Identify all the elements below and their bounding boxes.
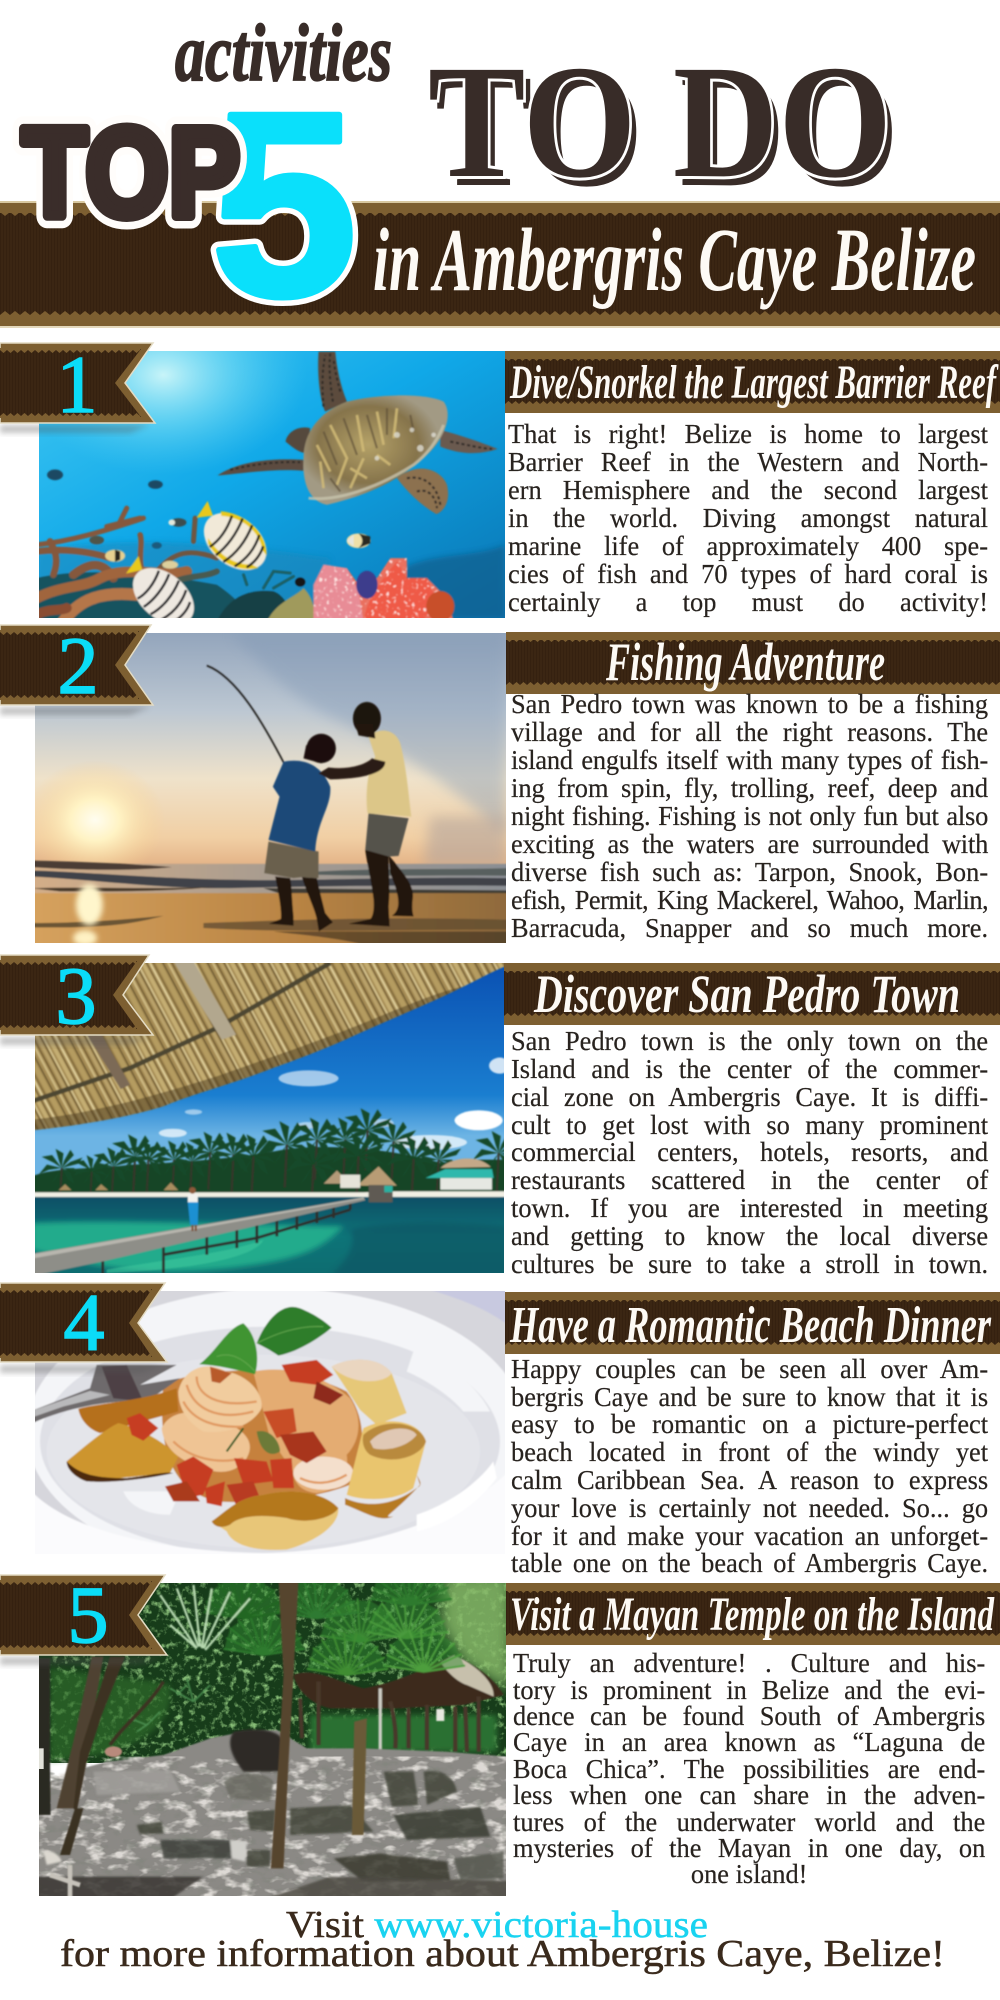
text block: Mayan temple: one island!	[691, 1858, 807, 1889]
thatch roof	[32, 960, 507, 1130]
corals	[37, 508, 217, 621]
text block: dive and snorkel: certainly a top must do activity!	[508, 586, 988, 617]
text block: dive and snorkel: in the world. Diving amongst natural	[508, 502, 988, 533]
plantains	[78, 1388, 178, 1433]
ground and stone terraces	[36, 1730, 509, 1899]
text block: San Pedro town: San Pedro town is the only town on the	[511, 1025, 988, 1056]
big cyan number 5: 5	[211, 58, 357, 351]
water	[32, 1197, 507, 1276]
ribbon number 5: 5	[68, 1569, 108, 1660]
man silhouette	[319, 702, 414, 926]
text block: romantic beach dinner: table one on the beach of Ambergris Caye.	[511, 1547, 988, 1578]
text block: San Pedro town: commercial centers, hotels, resorts, and	[511, 1136, 988, 1167]
text block: fishing adventure: night fishing. Fishing is not only fun but also	[511, 800, 988, 831]
text block: fishing adventure	[510, 688, 988, 944]
text block: dive and snorkel: ern Hemisphere and the second largest	[508, 474, 988, 505]
text block: San Pedro town: town. If you are interested in meeting	[511, 1192, 988, 1223]
text block: Mayan temple: tures of the underwater world and the	[513, 1806, 985, 1837]
title: activities: activities	[175, 7, 392, 98]
photo 1: sea turtle and reef	[39, 351, 505, 618]
text block: romantic beach dinner: for it and make your vacation an unforget-	[511, 1520, 988, 1551]
ribbon number 5	[0, 1569, 167, 1665]
small fish	[47, 470, 371, 587]
palm fans	[204, 1562, 464, 1675]
sea	[32, 864, 509, 894]
text block: romantic beach dinner: calm Caribbean Sea. A reason to express	[511, 1464, 988, 1495]
text block: San Pedro town	[511, 1025, 988, 1279]
ribbon number 3: 3	[56, 950, 96, 1041]
sea turtle	[217, 352, 498, 514]
wooden dock	[32, 1197, 366, 1276]
footer call to action: for more information about Ambergris Caye, Belize!	[60, 1933, 945, 1975]
photo 2: father and son fishing at sunset	[35, 633, 506, 943]
text block: San Pedro town: cial zone on Ambergris Caye. It is diffi-	[511, 1081, 988, 1112]
footer call to action	[60, 1904, 945, 1975]
text block: romantic beach dinner: bergris Caye and be sure to know that it is	[511, 1381, 988, 1412]
text block: Mayan temple: Truly an adventure! . Culture and his-	[513, 1647, 985, 1678]
fork	[32, 1365, 180, 1423]
boy silhouette	[264, 734, 336, 931]
text block: Mayan temple: less when one can share in the adven-	[513, 1779, 985, 1810]
clouds	[159, 1058, 510, 1150]
tomatoes	[127, 1360, 343, 1506]
text block: San Pedro town: cult to get lost with so many prominent	[511, 1109, 988, 1140]
text block: romantic beach dinner: beach located in front of the windy yet	[511, 1436, 988, 1467]
shrimp	[162, 1366, 358, 1493]
fishing rod	[207, 666, 286, 767]
text block: romantic beach dinner	[510, 1353, 988, 1578]
text block: Mayan temple: dence can be found South of Ambergris	[513, 1700, 985, 1731]
text block: Mayan temple	[513, 1647, 985, 1889]
ribbon number 1	[0, 339, 155, 433]
text block: Mayan temple: Boca Chica”. The possibilities are end-	[513, 1753, 985, 1784]
woman on dock	[188, 1187, 198, 1231]
ribbon number 4	[0, 1277, 167, 1373]
text block: fishing adventure: Barracuda, Snapper and so much more.	[511, 912, 988, 943]
red soft coral	[314, 558, 454, 621]
text block: fishing adventure: exciting as the waters are surrounded with	[511, 828, 988, 859]
text block: Mayan temple: tory is prominent in Belize and the evi-	[513, 1674, 985, 1705]
text block: San Pedro town: cultures be sure to take a stroll in town.	[511, 1248, 988, 1279]
title: TOP: TOP	[22, 102, 240, 243]
title: TO DO: TO DO	[435, 42, 899, 221]
ribbon number 2	[0, 620, 153, 715]
text block: fishing adventure: ing from spin, fly, trolling, reef, deep and	[511, 772, 988, 803]
footer call to action: Visit www.victoria-house	[286, 1904, 708, 1946]
beach	[32, 1191, 507, 1198]
resort huts	[324, 1158, 494, 1202]
text block: dive and snorkel	[508, 418, 988, 618]
ribbon number 3	[0, 950, 153, 1045]
text block: fishing adventure: San Pedro town was known to be a fishing	[511, 688, 988, 719]
text block: Mayan temple: Caye in an area known as “Laguna de	[513, 1726, 985, 1757]
text block: Mayan temple: mysteries of the Mayan in one day, on	[513, 1832, 985, 1863]
butterfly fish	[184, 494, 278, 582]
text block: San Pedro town: restaurants scattered in the center of	[511, 1164, 988, 1195]
photo 5: Mayan temple ruins in jungle	[39, 1583, 506, 1896]
text block: romantic beach dinner: Happy couples can be seen all over Am-	[511, 1353, 988, 1384]
title: TO DO: TO DO	[428, 33, 892, 212]
big cyan number 5: 5	[211, 58, 357, 351]
wet sand	[32, 893, 509, 945]
ribbon number 1: 1	[56, 339, 98, 430]
text block: fishing adventure: island engulfs itself with many types of fish-	[511, 744, 988, 775]
photo 4: shrimp dinner plate	[35, 1291, 505, 1554]
text block: dive and snorkel: marine life of approximately 400 spe-	[508, 530, 988, 561]
text block: San Pedro town: and getting to know the local diverse	[511, 1220, 988, 1251]
scallops	[212, 1360, 426, 1550]
text block: fishing adventure: efish, Permit, King Mackerel, Wahoo, Marlin,	[511, 884, 988, 915]
ribbon number 4: 4	[64, 1277, 104, 1368]
title: TOP: TOP	[22, 102, 240, 243]
palm tree line	[32, 1108, 526, 1207]
text block: dive and snorkel: Barrier Reef in the Western and North-	[508, 446, 988, 477]
photo 3: San Pedro dock and thatch roof	[35, 963, 504, 1273]
thatched hut	[294, 1655, 504, 1757]
header band	[0, 201, 1000, 328]
basil leaves	[199, 1307, 332, 1374]
text block: dive and snorkel: That is right! Belize is home to largest	[508, 418, 988, 449]
text block: romantic beach dinner: easy to be romantic on a picture-perfect	[511, 1408, 988, 1439]
ribbon number 2: 2	[58, 620, 98, 711]
text block: romantic beach dinner: your love is certainly not needed. So... go	[511, 1492, 988, 1523]
tree trunks	[37, 1580, 367, 1899]
sauce base	[162, 1371, 362, 1502]
text block: fishing adventure: village and for all the right reasons. The	[511, 716, 988, 747]
text block: dive and snorkel: cies of fish and 70 types of hard coral is	[508, 558, 988, 589]
text block: San Pedro town: Island and is the center of the commer-	[511, 1053, 988, 1084]
text block: fishing adventure: diverse fish such as: Tarpon, Snook, Bon-	[511, 856, 988, 887]
